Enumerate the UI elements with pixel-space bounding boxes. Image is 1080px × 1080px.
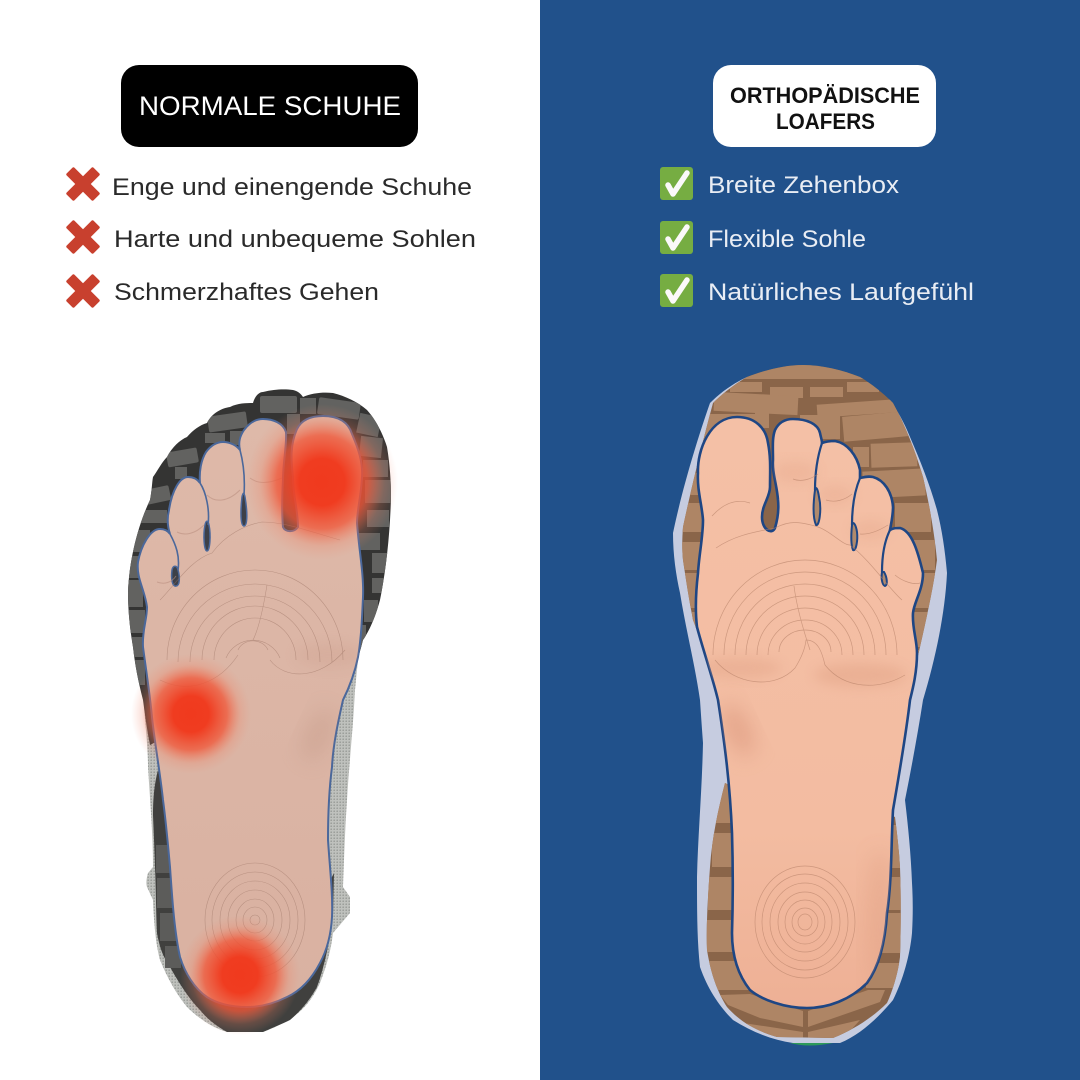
- outsole heel tread blocks: [705, 780, 903, 1042]
- skin shading: [698, 462, 906, 990]
- skin shading: [307, 646, 360, 750]
- text: negative point 1: Enge und einengende Schuhe: [112, 174, 472, 201]
- list: positive points: [660, 167, 974, 307]
- skin sole of the foot: [696, 417, 923, 1008]
- toe pad creases: [157, 478, 282, 583]
- heading: orthopaedische loafers: [713, 65, 936, 147]
- icon: green check 1: [660, 167, 693, 200]
- outsole toe tread blocks: [682, 362, 935, 680]
- panel: background right: [540, 0, 1080, 1080]
- heading: orthopaedische loafers: ORTHOPÄDISCHE: [730, 83, 920, 108]
- pain spot: ball of foot: [131, 654, 251, 774]
- heading: normale schuhe: NORMALE SCHUHE: [139, 91, 401, 121]
- green midsole tip: [790, 1043, 833, 1046]
- illustration: foot in orthopaedic loafer: [673, 362, 947, 1046]
- palm creases and ridges: [712, 474, 920, 978]
- illustration: foot in normal shoe: [128, 389, 398, 1035]
- text: positive point 2: Flexible Sohle: [708, 226, 866, 253]
- palm creases and ridges: [160, 522, 345, 977]
- text: positive point 3: Natürliches Laufgefühl: [708, 279, 974, 306]
- outsole toe section: [128, 389, 391, 745]
- toe separation slits: [814, 488, 887, 586]
- list: negative points: [56, 157, 476, 318]
- heading: orthopaedische loafers: LOAFERS: [776, 109, 875, 134]
- heading: normale schuhe: [121, 65, 418, 147]
- midsole lavender outer: [673, 370, 947, 1043]
- icon: red cross 1: [56, 157, 110, 211]
- pain spot: big toe: [246, 404, 398, 560]
- skin sole of the foot: [138, 416, 363, 1007]
- shoe upper mesh: [143, 640, 360, 1032]
- text: positive point 1: Breite Zehenbox: [708, 172, 899, 199]
- outsole brown heel section: [707, 783, 901, 1038]
- toe outlines continuing between the toes: [815, 443, 890, 572]
- icon: red cross 2: [56, 210, 110, 264]
- outsole lower dark band: [153, 770, 334, 1032]
- text: negative point 3: Schmerzhaftes Gehen: [114, 279, 379, 306]
- icon: green check 3: [660, 274, 693, 307]
- icon: green check 2: [660, 221, 693, 254]
- pain spot: heel: [180, 915, 300, 1035]
- toe pad outlines continuing between the toes: [170, 450, 244, 570]
- panel: background left: [0, 0, 540, 1080]
- outsole tread blocks: [128, 396, 392, 685]
- lower tread blocks: [156, 845, 181, 968]
- toe separation slits: [172, 493, 247, 586]
- text: negative point 2: Harte und unbequeme Sohlen: [114, 226, 476, 253]
- icon: red cross 3: [56, 264, 110, 318]
- outsole brown toe section: [682, 365, 937, 700]
